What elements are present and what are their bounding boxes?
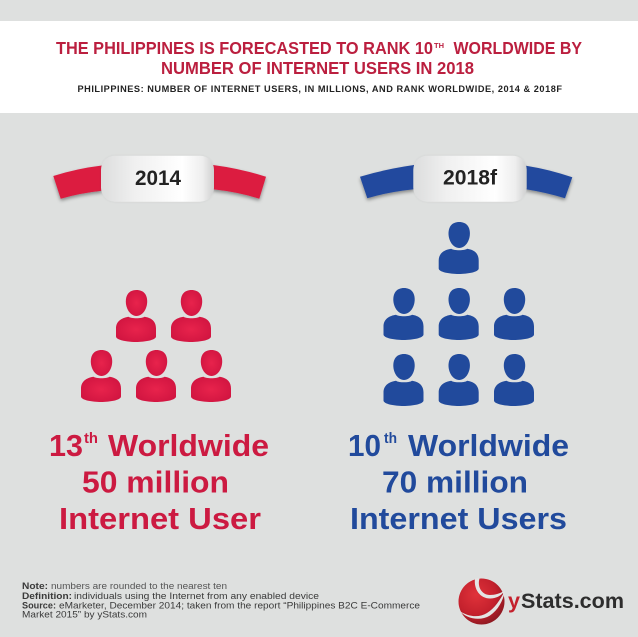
title: NUMBER OF INTERNET USERS IN 2018 — [161, 58, 474, 78]
stats: 2014: th — [84, 430, 98, 447]
subtitle: PHILIPPINES: NUMBER OF INTERNET USERS, IN MILLIONS, AND RANK WORLDWIDE, 2014 & 2018F — [78, 84, 562, 94]
stats: 2014 — [49, 429, 269, 536]
icon group: 7 blue people — [384, 222, 534, 406]
wordmark: Stats.com — [521, 590, 624, 613]
stats: 2014: Internet User — [59, 502, 261, 536]
panel: 2014 — [49, 156, 269, 536]
stats: 2018f: th — [384, 430, 397, 447]
ribbon: 2014: 2014 — [135, 167, 181, 190]
stats: 2018f: 70 million — [382, 466, 528, 500]
notes and source: Market 2015” by yStats.com — [22, 609, 147, 619]
stats: 2018f: Internet Users — [350, 502, 567, 536]
ribbon: 2018f: 2018f — [443, 166, 498, 190]
stats: 2014: Worldwide — [108, 429, 269, 463]
notes and source: Note: — [22, 581, 48, 591]
notes and source: Definition: — [22, 591, 72, 601]
title: WORLDWIDE BY — [454, 38, 582, 58]
title: TH — [434, 41, 444, 50]
stats: 2018f: 10 — [348, 429, 381, 463]
icon group: 5 red people — [81, 290, 231, 402]
notes and source — [22, 581, 420, 619]
title: THE PHILIPPINES IS FORECASTED TO RANK 10 — [56, 38, 433, 58]
notes and source: individuals using the Internet from any enabled device — [74, 591, 319, 601]
stats: 2018f — [348, 429, 569, 536]
ribbon: 2018f — [360, 156, 572, 202]
icon: globe — [458, 578, 505, 624]
stats: 2014: 13 — [49, 429, 83, 463]
notes and source: numbers are rounded to the nearest ten — [51, 581, 227, 591]
logo: yStats.com — [458, 578, 624, 624]
notes and source: Source: — [22, 600, 56, 610]
header band — [0, 21, 638, 113]
notes and source: eMarketer, December 2014; taken from the report “Philippines B2C E-Commerce — [59, 600, 420, 610]
ribbon: 2014 — [53, 156, 266, 202]
wordmark: y — [508, 590, 520, 613]
stats: 2014: 50 million — [82, 466, 229, 500]
stats: 2018f: Worldwide — [408, 429, 569, 463]
panel: 2018f — [348, 156, 572, 536]
title — [56, 38, 582, 78]
